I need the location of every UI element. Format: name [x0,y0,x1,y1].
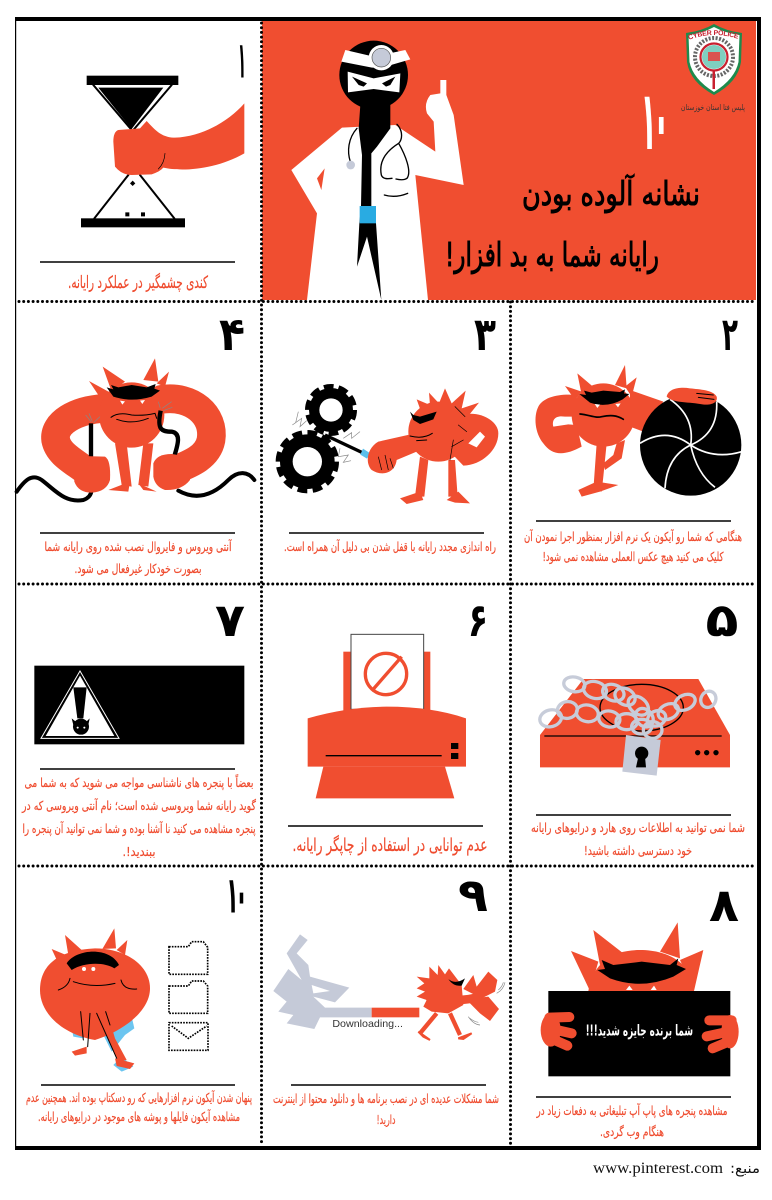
text: ۱ [239,33,245,87]
caption 4: بصورت خودکار غیرفعال می شود. [74,561,202,577]
caption 8 [536,1103,728,1140]
logo: cyber police shield: CYBER POLICE [688,30,739,40]
number 8: ۸ [709,878,739,932]
caption 10 [26,1090,252,1125]
title: رایانه شما به بد افزار! [445,235,659,274]
illustration: monster hiding icons [40,928,208,1072]
caption 9: دارید! [376,1112,396,1128]
source credit: www.pinterest.com [593,1160,723,1177]
panel: header with doctor and title [262,21,756,300]
number 4: ۴ [219,307,245,361]
caption 10: مشاهده آیکون فایلها و پوشه های موجود در درایوهای رایانه. [38,1109,240,1125]
illustration: monster cutting cables [17,358,254,501]
number 3: ۳ [474,307,496,361]
number 2: ۲ [722,307,738,361]
caption 1: کندی چشمگیر در عملکرد رایانه. [68,272,209,293]
caption 7: گوید رایانه شما ویروسی شده است؛ نام آنتی ویروسی که در [21,798,256,814]
panel: 6 printer failure [288,593,488,856]
illustration: monster jamming gears [279,387,498,504]
caption 7: ببندید!. [122,844,156,859]
caption 7: پنجره مشاهده می کنید نا آشنا بوده و شما نمی توانید آن پنجره را [22,821,256,837]
illustration: hourglass in fist [81,76,244,227]
caption 6: عدم توانایی در استفاده از چاپگر رایانه. [292,834,488,856]
number 7: ۷ [215,593,245,647]
source credit: منبع: [730,1161,760,1177]
caption 7: بعضاً با پنجره های ناشناسی مواجه می شوید که به شما می [24,773,254,791]
number 5: ۵ [706,593,738,647]
panel: 2 unresponsive software [524,307,742,565]
panel: 9 download problems [273,868,505,1128]
logo: cyber police shield [686,24,742,95]
caption 4: آنتی ویروس و فایروال نصب شده روی رایانه شما [44,539,232,555]
caption 10: پنهان شدن آیکون نرم افزارهایی که رو دسکتاپ بوده اند. همچنین عدم [26,1090,252,1106]
caption 9: شما مشکلات عدیده ای در نصب برنامه ها و دانلود محتوا از اینترنت [273,1091,499,1107]
caption 4 [44,539,232,577]
text: ۱۰ [228,868,246,922]
illustration: doctor [291,41,464,300]
banner text: شما برنده جایزه شدید!!! [586,1022,693,1040]
panel: 3 random restarts [279,307,498,555]
illustration: blocked printer [308,634,466,798]
panel: header with doctor and title: ۱۰ [642,76,668,165]
caption 8: هنگام وب گردی. [600,1124,664,1140]
panel: 10 hidden icons [26,868,252,1125]
illustration: monster leaning on ball [536,365,742,497]
caption 9 [273,1091,499,1128]
caption 5: خود دسترسی داشته باشید! [584,843,692,859]
caption 7 [21,773,256,859]
panel: 8 popups [536,878,739,1140]
caption 3: راه اندازی مجدد رایانه با قفل شدن بی دلیل آن همراه است. [284,539,496,555]
number 6: ۶ [468,593,488,647]
downloading label: Downloading... [332,1019,403,1030]
title: نشانه آلوده بودن [522,174,700,213]
logo caption: پلیس فتا استان خوزستان [681,103,745,112]
panel: 5 locked drives [531,593,745,859]
illustration: chained hard drive [538,675,730,776]
caption 5 [531,820,745,859]
illustration: warning window [34,666,244,744]
illustration: monster with prize sign [541,922,739,1076]
panel: 1 slowdown [40,33,245,293]
panel: 4 antivirus disabled [17,307,254,577]
number 9: ۹ [458,868,488,922]
caption 2 [524,529,742,565]
panel: 7 fake antivirus warning [21,593,256,859]
illustration: monster pulling download bar [273,934,505,1040]
title [445,174,700,274]
